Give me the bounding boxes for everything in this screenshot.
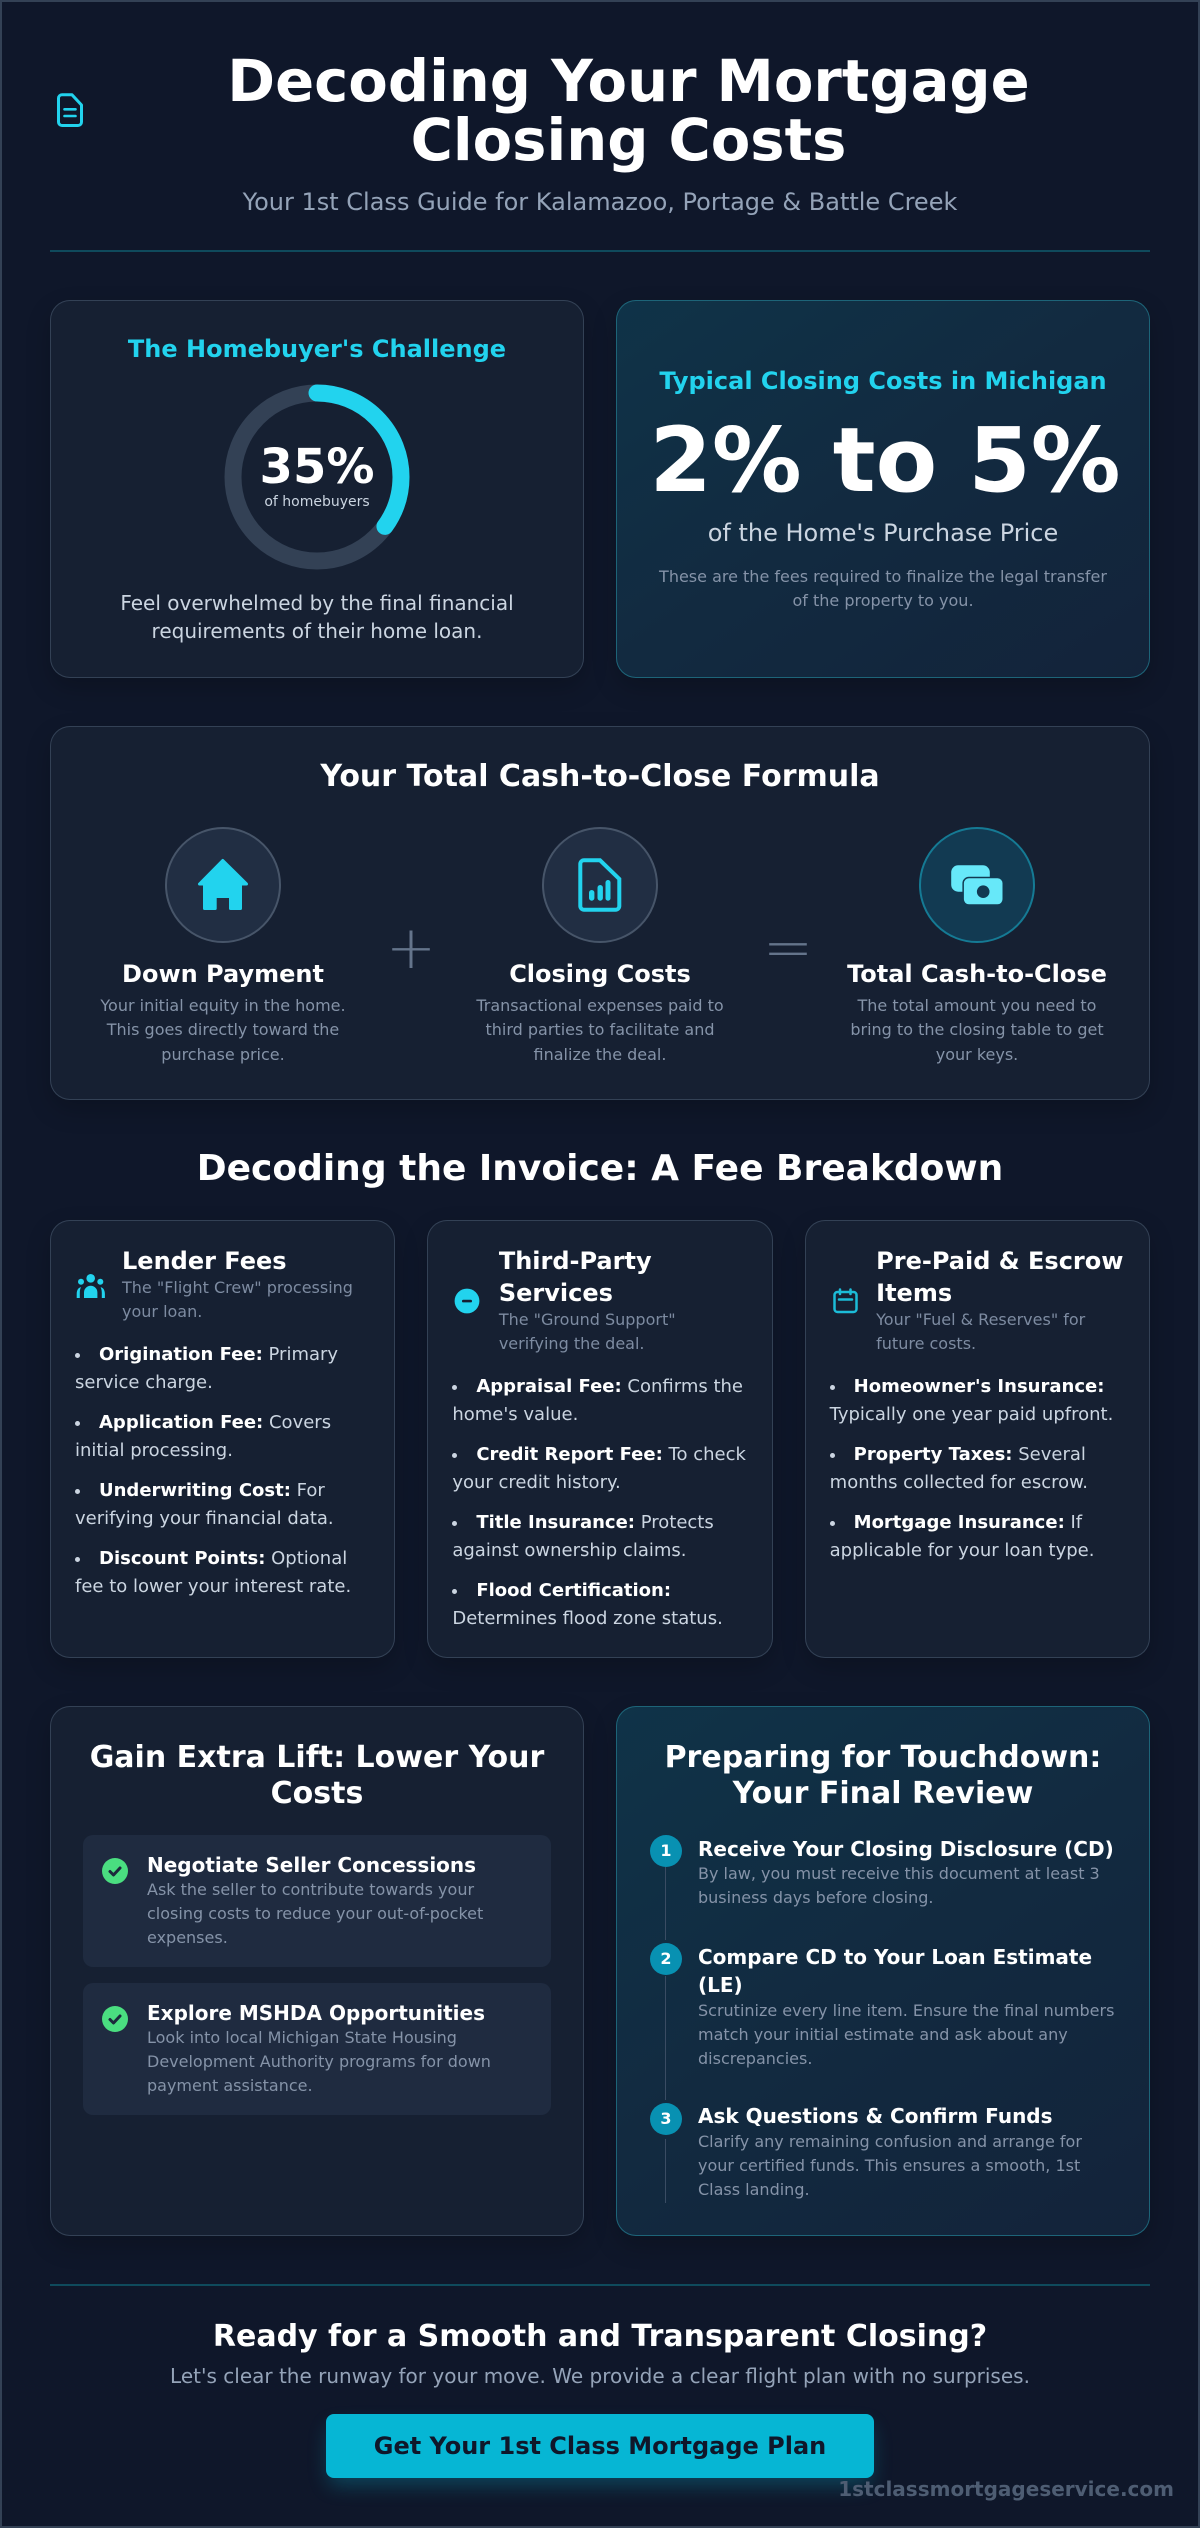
card title: Items — [876, 1279, 952, 1307]
tip text: expenses. — [147, 1928, 228, 1947]
tip text: Ask the seller to contribute towards your — [147, 1880, 474, 1899]
icon: money — [919, 827, 1035, 943]
card subtitle: The "Ground Support" — [499, 1310, 676, 1329]
step title: (LE) — [698, 1973, 743, 1997]
subtitle: Your 1st Class Guide for Kalamazoo, Portage & Battle Creek — [243, 188, 957, 216]
fee list — [452, 1376, 746, 1629]
donut chart: 35% — [224, 384, 410, 570]
description — [850, 996, 1104, 1064]
panel: pre-paid and escrow — [805, 1220, 1150, 1658]
label: Total Cash-to-Close — [847, 960, 1107, 988]
fee list: Discount Points: Optional — [99, 1548, 347, 1569]
fee list: Property Taxes: Several — [854, 1444, 1086, 1465]
step 1 — [650, 1835, 1114, 1907]
tip text: payment assistance. — [147, 2076, 313, 2095]
footer text: Let's clear the runway for your move. We provide a clear flight plan with no surprises. — [170, 2364, 1030, 2388]
heading: Preparing for Touchdown: — [665, 1740, 1101, 1775]
step number: 3 — [660, 2109, 672, 2128]
icon: calendar — [833, 1288, 858, 1314]
panel: cash-to-close formula — [50, 726, 1150, 1100]
step number — [650, 2103, 682, 2135]
description: These are the fees required to finalize the legal transfer — [659, 567, 1107, 586]
step text: discrepancies. — [698, 2049, 812, 2068]
step title: Compare CD to Your Loan Estimate — [698, 1945, 1092, 1969]
description: third parties to facilitate and — [485, 1020, 715, 1039]
card subtitle: The "Flight Crew" processing — [122, 1278, 353, 1297]
footer call to action — [0, 2300, 1200, 2528]
card subtitle: Your "Fuel & Reserves" for — [876, 1310, 1085, 1329]
formula item: down payment — [100, 827, 346, 1064]
description — [476, 996, 724, 1064]
connector lines — [665, 1867, 666, 2203]
card subtitle: future costs. — [876, 1334, 976, 1353]
fee list: Origination Fee: Primary — [99, 1344, 338, 1365]
label: Down Payment — [122, 960, 324, 988]
step number: 2 — [660, 1949, 672, 1968]
fee list: Homeowner's Insurance: — [854, 1376, 1104, 1397]
description: purchase price. — [161, 1045, 285, 1064]
card subtitle — [498, 1310, 676, 1353]
title — [227, 48, 1030, 174]
footer heading: Ready for a Smooth and Transparent Closing? — [213, 2319, 987, 2354]
panel: third-party services — [427, 1220, 773, 1658]
title: Decoding Your Mortgage — [227, 48, 1030, 115]
step title — [698, 1945, 1092, 1997]
header — [57, 48, 1030, 216]
heading: Typical Closing Costs in Michigan — [659, 367, 1107, 395]
icon: people — [76, 1274, 105, 1298]
panel: final review — [616, 1706, 1150, 2236]
icon: document with chart — [542, 827, 658, 943]
tip: MSHDA — [83, 1983, 551, 2115]
operator: plus: + — [386, 913, 436, 983]
step text: your certified funds. This ensures a smooth, 1st — [698, 2156, 1080, 2175]
tip: seller concessions — [83, 1835, 551, 1967]
description: This goes directly toward the — [107, 1020, 339, 1039]
heading: The Homebuyer's Challenge — [128, 334, 506, 362]
card title: Lender Fees — [122, 1247, 287, 1275]
fee list: months collected for escrow. — [830, 1472, 1088, 1493]
panel: typical closing costs — [616, 300, 1150, 678]
description: Transactional expenses paid to — [476, 996, 724, 1015]
formula item: closing costs — [476, 827, 724, 1064]
step text — [698, 2001, 1114, 2068]
description: requirements of their home loan. — [152, 619, 482, 643]
button — [326, 2414, 874, 2478]
tip text: closing costs to reduce your out-of-pocket — [147, 1904, 483, 1923]
fee list: Mortgage Insurance: If — [854, 1512, 1082, 1533]
panel: lender fees — [50, 1220, 395, 1658]
description: The total amount you need to — [858, 996, 1096, 1015]
fee list: against ownership claims. — [452, 1540, 686, 1561]
step text: business days before closing. — [698, 1888, 933, 1907]
icon: house — [165, 827, 281, 943]
step number — [650, 1835, 682, 1867]
heading: Your Final Review — [733, 1776, 1033, 1811]
step 2 — [650, 1943, 1114, 2068]
fee list: Underwriting Cost: For — [99, 1480, 325, 1501]
fee list: Typically one year paid upfront. — [830, 1404, 1113, 1425]
tip title: Negotiate Seller Concessions — [147, 1853, 476, 1877]
fee list: Flood Certification: — [476, 1580, 671, 1601]
tip title: Explore MSHDA Opportunities — [147, 2001, 485, 2025]
description — [120, 591, 514, 643]
description: bring to the closing table to get — [850, 1020, 1104, 1039]
tip text — [147, 2028, 491, 2095]
icon: check — [102, 2006, 128, 2032]
step text: Scrutinize every line item. Ensure the final numbers — [698, 2001, 1114, 2020]
heading: Gain Extra Lift: Lower Your — [90, 1740, 544, 1775]
panel: homebuyer's challenge — [50, 300, 584, 678]
fee list: fee to lower your interest rate. — [75, 1576, 351, 1597]
fee list: your credit history. — [452, 1472, 621, 1493]
step text: match your initial estimate and ask about any — [698, 2025, 1068, 2044]
card subtitle: your loan. — [122, 1302, 202, 1321]
card title — [876, 1247, 1123, 1307]
icon: document — [57, 93, 83, 127]
tip text — [147, 1880, 483, 1947]
panel: gain extra lift — [50, 1706, 584, 2236]
fee list: Appraisal Fee: Confirms the — [476, 1376, 743, 1397]
description — [100, 996, 346, 1064]
step text: Class landing. — [698, 2180, 810, 2199]
stat label: of homebuyers — [264, 494, 370, 510]
fee list: home's value. — [452, 1404, 578, 1425]
card title — [499, 1247, 652, 1307]
description — [658, 567, 1107, 610]
fee list: service charge. — [75, 1372, 213, 1393]
card title: Pre-Paid & Escrow — [876, 1247, 1123, 1275]
fee list: Title Insurance: Protects — [476, 1512, 714, 1533]
heading — [90, 1740, 544, 1811]
card title: Services — [499, 1279, 613, 1307]
heading: Your Total Cash-to-Close Formula — [320, 759, 880, 794]
step number: 1 — [660, 1841, 672, 1860]
stat caption: of the Home's Purchase Price — [708, 519, 1058, 547]
tip text: Look into local Michigan State Housing — [147, 2028, 457, 2047]
fee list: Determines flood zone status. — [452, 1608, 723, 1629]
formula item: total cash-to-close — [847, 827, 1107, 1064]
label: Closing Costs — [509, 960, 691, 988]
step text: By law, you must receive this document at least 3 — [698, 1864, 1100, 1883]
button: Get Your 1st Class Mortgage Plan — [374, 2432, 826, 2460]
fee list: Credit Report Fee: To check — [476, 1444, 746, 1465]
fee list — [830, 1376, 1113, 1561]
stat value: 35% — [260, 439, 374, 495]
card subtitle — [876, 1310, 1086, 1353]
fee list: initial processing. — [75, 1440, 233, 1461]
heading: Costs — [271, 1776, 363, 1811]
tip text: Development Authority programs for down — [147, 2052, 491, 2071]
step text: Clarify any remaining confusion and arrange for — [698, 2132, 1082, 2151]
description: your keys. — [936, 1045, 1018, 1064]
fee list: verifying your financial data. — [75, 1508, 334, 1529]
heading — [665, 1740, 1101, 1811]
step title: Ask Questions & Confirm Funds — [698, 2104, 1053, 2128]
watermark: 1stclassmortgageservice.com — [838, 2477, 1174, 2501]
fee list: Application Fee: Covers — [99, 1412, 331, 1433]
operator: equals: = — [763, 913, 813, 983]
step 3 — [650, 2103, 1082, 2199]
step text — [698, 2132, 1082, 2199]
description: finalize the deal. — [534, 1045, 666, 1064]
step text — [698, 1864, 1100, 1907]
card subtitle: verifying the deal. — [499, 1334, 644, 1353]
title: Closing Costs — [411, 107, 846, 174]
fee list: applicable for your loan type. — [830, 1540, 1094, 1561]
section heading: fee breakdown: Decoding the Invoice: A Fee Breakdown — [197, 1148, 1003, 1189]
description: Your initial equity in the home. — [100, 996, 346, 1015]
card title: Third-Party — [499, 1247, 652, 1275]
step number — [650, 1943, 682, 1975]
step title: Receive Your Closing Disclosure (CD) — [698, 1837, 1114, 1861]
big stat: 2% to 5% — [650, 409, 1120, 513]
icon: minus circle — [454, 1288, 480, 1314]
fee list — [75, 1344, 351, 1597]
icon: check — [102, 1858, 128, 1884]
card subtitle — [122, 1278, 353, 1321]
description: of the property to you. — [792, 591, 974, 610]
description: Feel overwhelmed by the final financial — [120, 591, 514, 615]
